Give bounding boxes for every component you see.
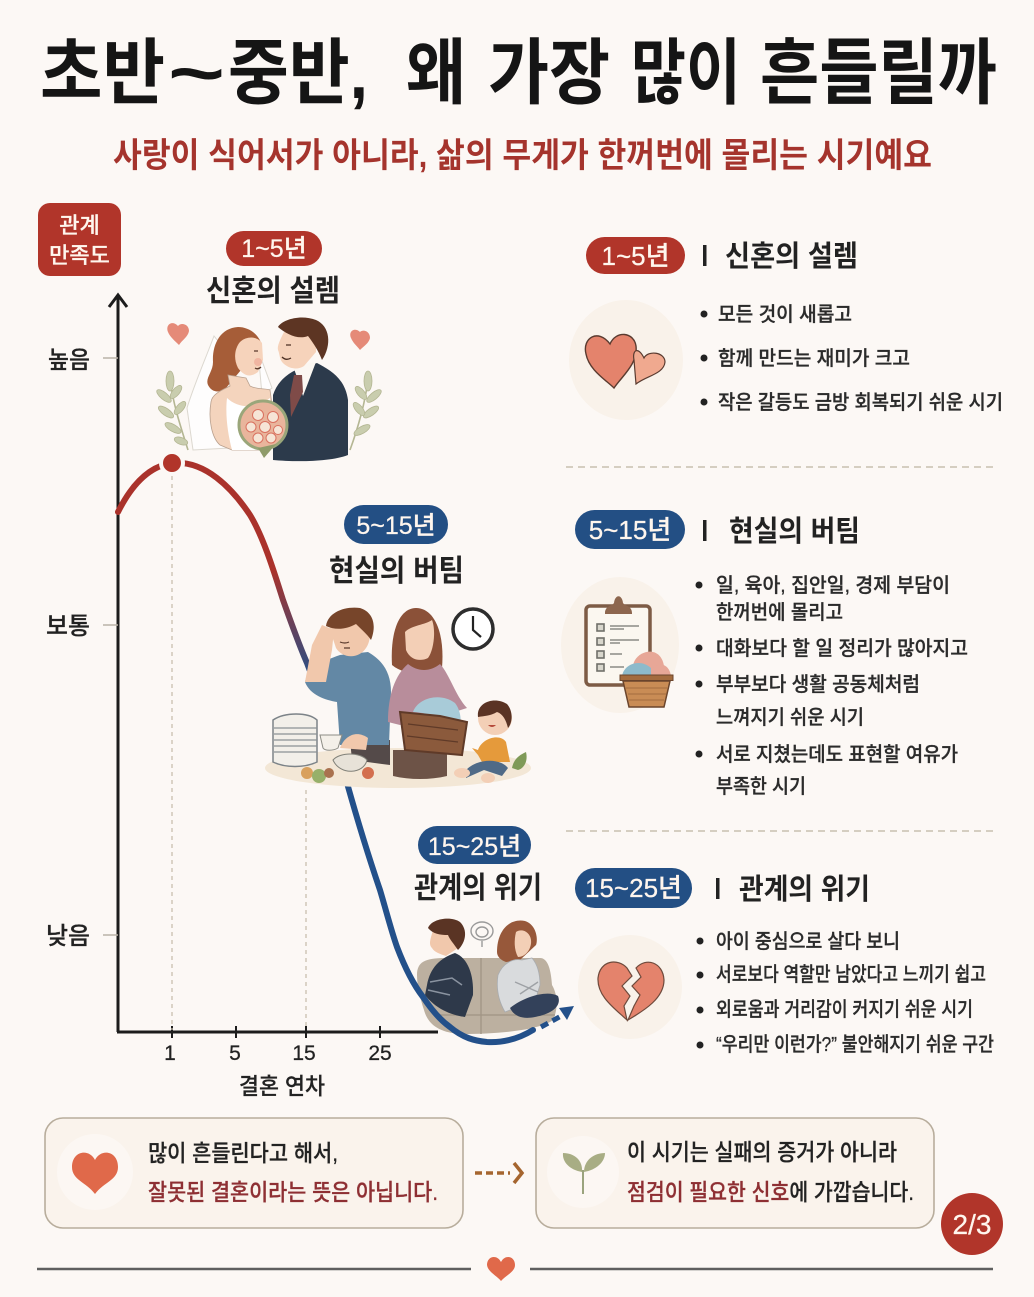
period badge (575, 510, 685, 549)
icon: sprout (547, 1136, 619, 1208)
period badge (575, 868, 692, 908)
bullet list (696, 574, 968, 798)
y axis label (38, 203, 121, 276)
stage label: 1~5 years: 1~5년 (241, 235, 307, 263)
x axis ticks: 15 (292, 1042, 316, 1065)
callout: signal to check (536, 1118, 934, 1228)
icon: broken heart (578, 935, 682, 1039)
period badge (586, 237, 685, 274)
panel: enduring reality (561, 510, 968, 798)
bullet list (700, 303, 1003, 414)
panel: relationship crisis (575, 868, 994, 1056)
panel: newlywed excitement (569, 237, 1003, 420)
bullet list: 서로 지쳤는데도 표현할 여유가 (716, 743, 958, 766)
y axis levels: 보통 (46, 613, 90, 640)
title: 가장 (488, 34, 610, 114)
bullet list: 부족한 시기 (716, 775, 806, 798)
stage label: 15~25 years: 15~25년 (428, 833, 521, 861)
stage label: 1~5 years: 신혼의 설렘 (206, 275, 340, 308)
title: 중반, (228, 34, 368, 114)
chart: relationship satisfaction curve (38, 203, 574, 1099)
stage label: 5~15 years: 5~15년 (356, 512, 436, 540)
bullet list (696, 930, 994, 1056)
x axis ticks: 결혼 연차 (239, 1073, 325, 1099)
y axis label: 만족도 (49, 243, 110, 268)
y axis label: 관계 (59, 213, 100, 238)
bullet list: 대화보다 할 일 정리가 많아지고 (716, 637, 968, 660)
title: 많이 (631, 34, 741, 114)
bullet list: 함께 만드는 재미가 크고 (718, 347, 910, 370)
title: 초반 (40, 34, 165, 114)
bullet list: 작은 갈등도 금방 회복되기 쉬운 시기 (718, 391, 1003, 414)
stage label: 1~5 years (206, 231, 340, 308)
callout text: 이 시기는 실패의 증거가 아니라 (627, 1139, 897, 1165)
icon: heart (57, 1134, 133, 1210)
icon: clipboard and laundry basket (561, 577, 679, 713)
x axis ticks: 5 (229, 1042, 241, 1065)
callout text: 많이 흔들린다고 해서, (148, 1140, 338, 1166)
title: ~ (168, 34, 225, 114)
bullet list: 모든 것이 새롭고 (718, 303, 852, 326)
page badge (941, 1193, 1003, 1255)
period badge: 15~25년 (585, 873, 682, 903)
callout text (148, 1140, 438, 1205)
stage label: 15~25 years: 관계의 위기 (414, 872, 542, 905)
callout: not a wrong marriage (45, 1118, 463, 1228)
callout text: 점검이 필요한 신호에 가깝습니다. (627, 1179, 914, 1205)
title: 왜 (406, 34, 466, 114)
footer divider with heart (37, 1257, 993, 1281)
bullet list: 아이 중심으로 살다 보니 (716, 930, 900, 953)
period badge: 5~15년 (589, 515, 671, 545)
icon: two hearts (569, 300, 683, 420)
panel heading: 관계의 위기 (739, 873, 870, 906)
period badge: 1~5년 (601, 241, 670, 271)
bullet list: 외로움과 거리감이 커지기 쉬운 시기 (716, 998, 973, 1021)
callout text: 잘못된 결혼이라는 뜻은 아닙니다. (148, 1179, 438, 1205)
axes (109, 295, 438, 1038)
curve (118, 452, 574, 1042)
subtitle: 사랑이 식어서가 아니라, 삶의 무게가 한꺼번에 몰리는 시기예요 (113, 137, 932, 175)
bullet list: 서로보다 역할만 남았다고 느끼기 쉽고 (716, 963, 986, 986)
arrow (475, 1163, 522, 1183)
x axis ticks: 1 (164, 1042, 176, 1065)
stage label: 5~15 years (329, 505, 464, 588)
bullet list: 부부보다 생활 공동체처럼 (716, 673, 920, 696)
panel heading: 현실의 버팀 (729, 515, 860, 548)
title (40, 34, 997, 114)
bullet list: 느껴지기 쉬운 시기 (716, 706, 864, 729)
title: 흔들릴까 (760, 34, 997, 114)
x axis ticks (164, 1042, 392, 1099)
stage label: 15~25 years (414, 826, 542, 905)
bullet list: 한꺼번에 몰리고 (716, 601, 843, 624)
page badge: 2/3 (953, 1209, 991, 1240)
illustration: busy family (265, 608, 531, 788)
panel heading: 신혼의 설렘 (725, 240, 858, 273)
illustration: couple in conflict (417, 919, 559, 1034)
callout text (627, 1139, 914, 1205)
bullet list: “우리만 이런가?” 불안해지기 쉬운 구간 (716, 1033, 994, 1056)
illustration: newlywed couple (155, 318, 383, 461)
bullet list: 일, 육아, 집안일, 경제 부담이 (716, 574, 950, 597)
y axis levels: 높음 (48, 347, 90, 374)
x axis ticks: 25 (368, 1042, 392, 1065)
y axis levels (46, 347, 118, 950)
y axis levels: 낮음 (46, 923, 90, 950)
stage label: 5~15 years: 현실의 버팀 (329, 555, 464, 588)
